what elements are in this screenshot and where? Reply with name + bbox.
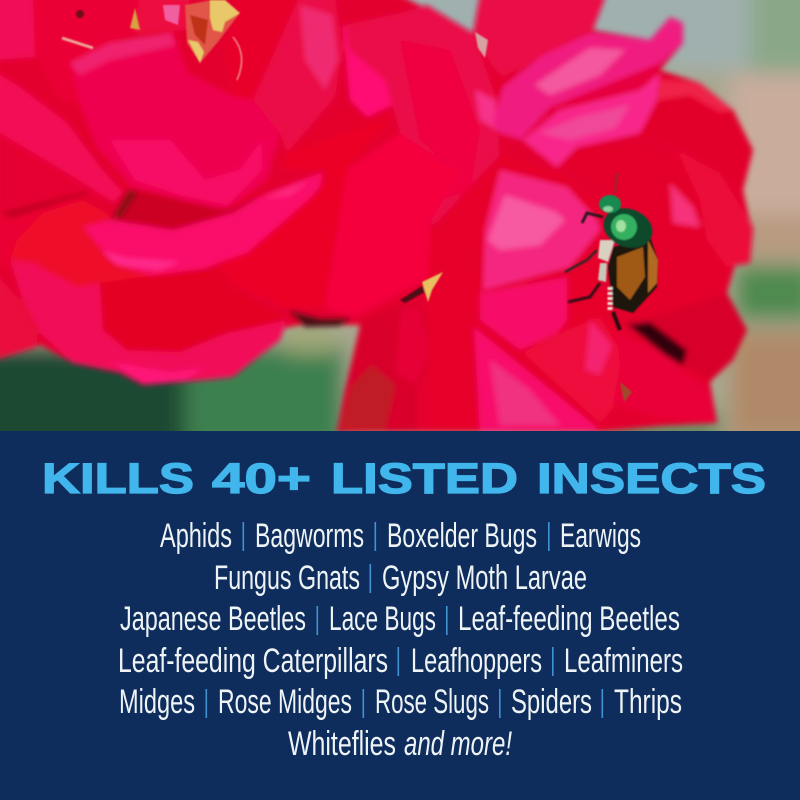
text block: insect names: Aphids xyxy=(160,517,232,555)
gap shadow xyxy=(114,191,244,230)
separators xyxy=(206,522,603,718)
text block: insect names: Whiteflies xyxy=(288,725,396,763)
icon: stamens and pollen xyxy=(62,0,632,402)
text block: insect names: and more! xyxy=(404,725,512,763)
text block: insect names: Rose Midges xyxy=(218,683,352,721)
heading xyxy=(42,455,766,503)
flower mass xyxy=(0,0,753,432)
text block: insect names: Fungus Gnats xyxy=(214,559,360,597)
right red petals xyxy=(642,108,654,134)
top centre petal xyxy=(473,0,606,77)
text block: insect names: Leaf-feeding Caterpillars xyxy=(118,642,388,680)
pink beetle petal xyxy=(428,156,502,276)
lower left of centre petal xyxy=(348,308,416,431)
dark bud xyxy=(288,310,352,327)
long mid petal xyxy=(83,172,323,275)
photo: red rose with Japanese beetle xyxy=(0,0,800,460)
heading: LISTED xyxy=(331,455,518,503)
heading: KILLS xyxy=(42,455,194,503)
text block: insect names: Gypsy Moth Larvae xyxy=(382,559,587,597)
text block: insect names: Midges xyxy=(119,683,195,721)
text block: insect names xyxy=(118,517,683,763)
lower right petals xyxy=(632,296,744,377)
text block: insect names: Spiders xyxy=(511,683,592,721)
icon: Japanese beetle xyxy=(565,173,658,330)
text block: insect names: Leafminers xyxy=(564,642,683,680)
centre top petal xyxy=(70,33,280,210)
panel: insect list xyxy=(0,431,800,800)
far pink lobe xyxy=(343,23,402,117)
blurred garden background xyxy=(0,0,800,460)
text block: insect names: Japanese Beetles xyxy=(120,600,306,638)
text block: insect names: Leafhoppers xyxy=(411,642,542,680)
heading: INSECTS xyxy=(537,455,766,503)
heading: 40+ xyxy=(212,455,311,503)
petal right of centre xyxy=(253,0,342,153)
lower left petal xyxy=(11,201,200,286)
text block: insect names: Bagworms xyxy=(255,517,364,555)
pink curling petal xyxy=(493,17,683,140)
text block: insect names: Earwigs xyxy=(560,517,641,555)
text block: insect names: Lace Bugs xyxy=(329,600,436,638)
text block: insect names: Rose Slugs xyxy=(375,683,489,721)
left petals xyxy=(0,72,123,202)
upper right-centre petal xyxy=(345,5,500,227)
text block: insect names: Leaf-feeding Beetles xyxy=(458,600,680,638)
top red inner petals xyxy=(33,0,140,103)
text block: insect names: Boxelder Bugs xyxy=(387,517,537,555)
centre big red petal xyxy=(217,200,312,267)
text block: insect names: Thrips xyxy=(614,683,682,721)
